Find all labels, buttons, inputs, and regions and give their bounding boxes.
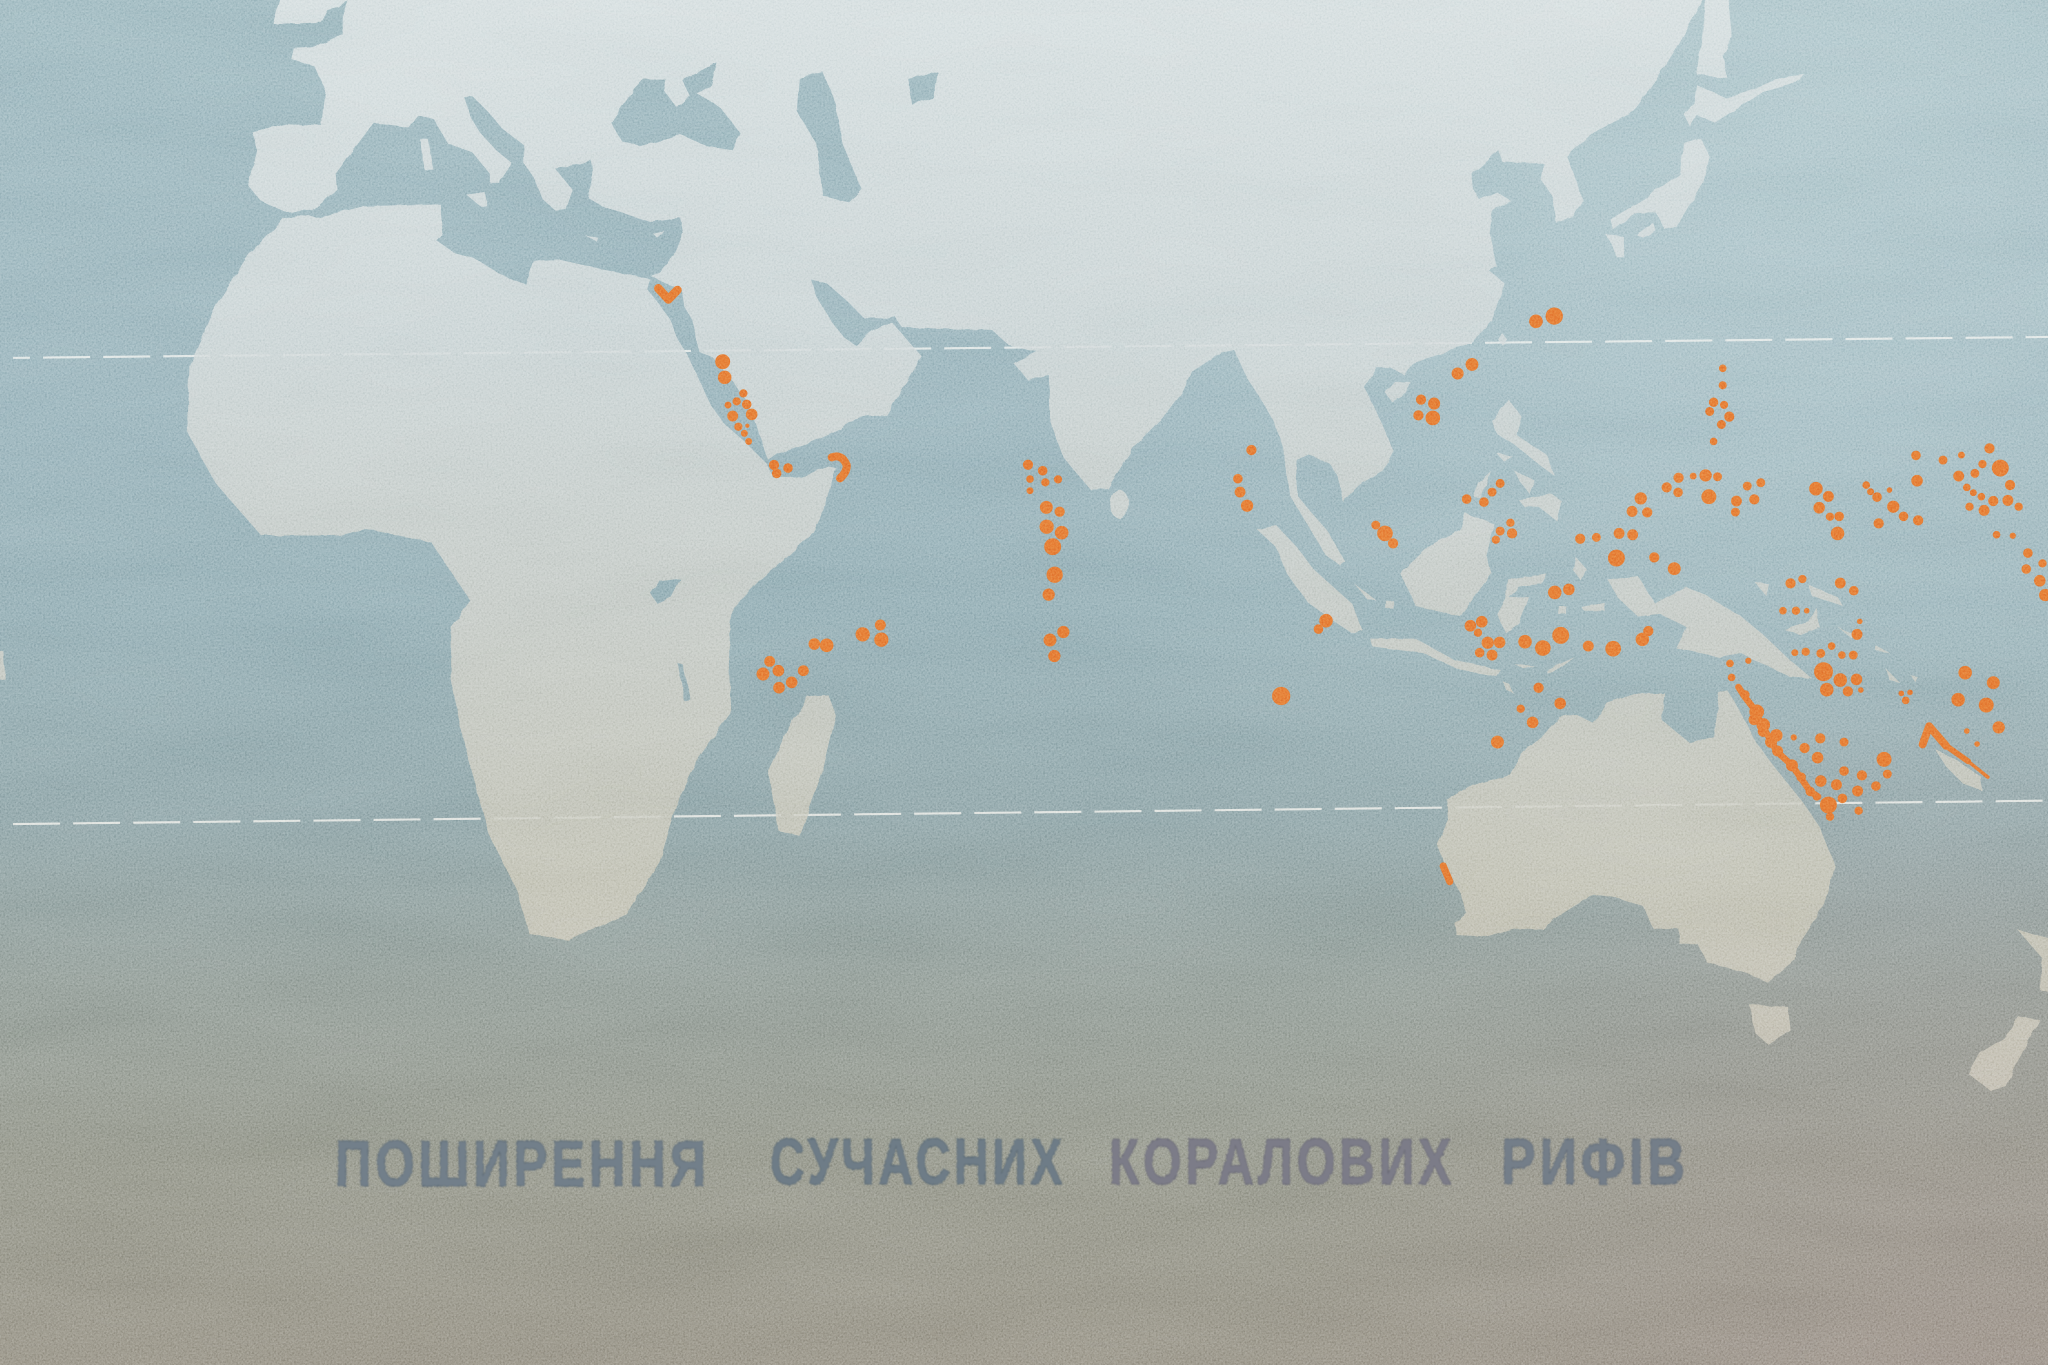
land masses <box>0 0 2048 1091</box>
land: Philippines <box>1473 400 1561 521</box>
coral reefs: New Caledonia chevron <box>1923 726 1988 777</box>
land: Japan, Sakhalin, Kurils <box>1605 0 1805 257</box>
land: Sri Lanka <box>1110 490 1128 519</box>
title <box>335 1125 1689 1200</box>
faint tropic lines printed over land <box>7 337 2048 824</box>
land: Tasmania <box>1749 1004 1791 1045</box>
coral reefs: Red Sea, Gulf of Aden, Indian Ocean <box>658 288 1069 693</box>
coral reefs: Southeast Asia and Pacific <box>1234 444 2048 820</box>
land: Melanesian islands <box>1754 581 1981 790</box>
land: Madagascar <box>768 695 836 836</box>
land: New Guinea <box>1608 576 1812 678</box>
world map <box>0 0 2048 1091</box>
land: Mediterranean islands <box>421 140 665 242</box>
title word 3: КОРАЛОВИХ <box>1109 1125 1455 1198</box>
title word 4: РИФІВ <box>1501 1125 1689 1198</box>
title word 1: ПОШИРЕННЯ <box>335 1127 710 1200</box>
tropic of Cancer dashed line <box>13 337 2048 358</box>
land: New Zealand <box>1968 930 2048 1091</box>
land: Australia <box>1437 690 1835 982</box>
coral reef: Western Australia <box>1443 866 1450 882</box>
tropic of Capricorn dashed line <box>7 801 2048 824</box>
land: Indonesia <box>1256 513 1605 694</box>
title word 2: СУЧАСНИХ <box>770 1125 1066 1198</box>
land: Scandinavia <box>273 0 347 24</box>
coral reefs: Great Barrier Reef <box>1738 687 1821 801</box>
land: Eurasia with inland seas <box>248 0 1708 566</box>
land: Africa with lakes <box>187 204 836 940</box>
coral reefs: East Asia and Mariana islands <box>1414 308 1734 444</box>
land: Taiwan and Hainan <box>1384 333 1507 402</box>
land: sliver at left edge <box>0 649 5 680</box>
